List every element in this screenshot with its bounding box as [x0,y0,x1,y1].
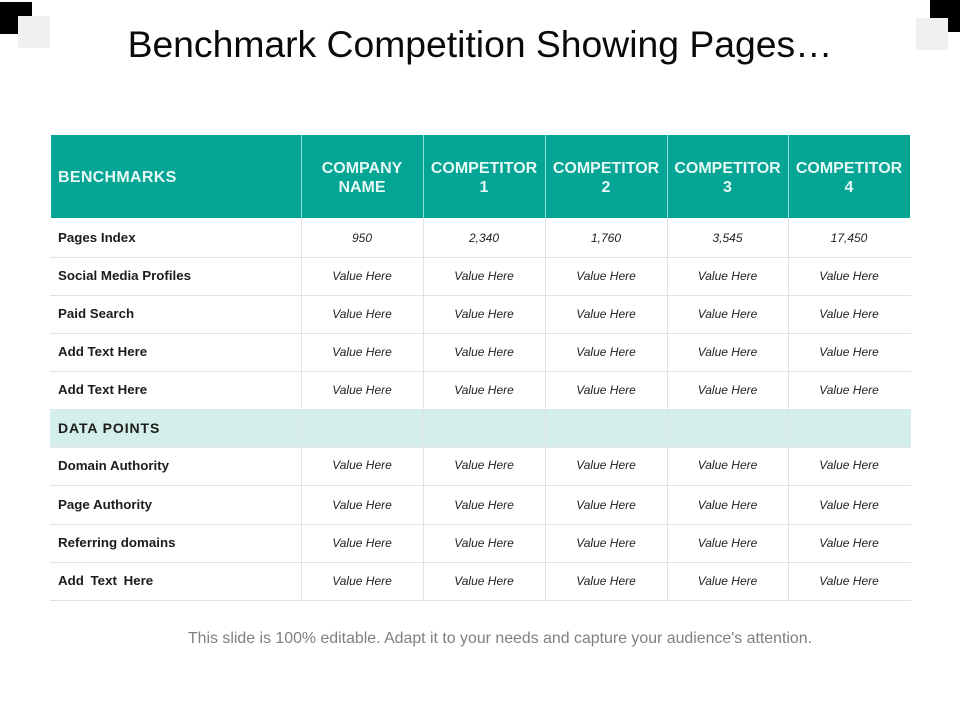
header: competitor 2 [545,135,667,218]
header: company name: COMPANY [322,160,402,177]
row: Social Media Profiles: Value Here [454,269,514,283]
row: Paid Search: Paid Search [58,306,134,321]
row: Add Text Here 2: Value Here [332,383,392,397]
row: Add Text Here: Value Here [454,345,514,359]
row: Pages Index: 17,450 [831,231,867,245]
header: competitor 2: COMPETITOR [553,160,659,177]
row: Social Media Profiles: Value Here [819,269,879,283]
row: Domain Authority: Value Here [576,458,636,472]
header: benchmarks [51,135,301,218]
row: Add Text Here 3: Value Here [819,574,879,588]
row: Social Media Profiles: Social Media Profiles [58,268,191,283]
row: Pages Index: 3,545 [712,231,743,245]
row: Paid Search: Value Here [576,307,636,321]
header: competitor 3: 3 [723,179,732,196]
header: competitor 1: 1 [480,179,488,196]
row: Add Text Here 3: Add Text Here [58,573,153,588]
row: Page Authority [50,486,911,525]
row: Add Text Here: Value Here [698,345,757,359]
icon: top-right corner squares [916,0,960,50]
header: competitor 4 [788,135,910,218]
row: Page Authority: Value Here [454,498,514,512]
row: Add Text Here 3 [50,562,911,601]
row: Social Media Profiles: Value Here [698,269,757,283]
row: Pages Index: Pages Index [58,230,136,245]
header: competitor 4: COMPETITOR [796,160,902,177]
row: Page Authority: Value Here [698,498,757,512]
row: Referring domains: Value Here [698,536,757,550]
row: Pages Index [50,219,911,258]
row: Social Media Profiles [50,257,911,296]
row: Domain Authority [50,447,911,486]
row: Add Text Here 2: Value Here [576,383,636,397]
row: Add Text Here 2: Value Here [454,383,514,397]
header: company name: NAME [338,179,386,196]
row: Paid Search: Value Here [332,307,392,321]
title: Benchmark Competition Showing Pages… [128,23,832,65]
row: Paid Search: Value Here [819,307,879,321]
row: Add Text Here [50,333,911,372]
row: Domain Authority: Value Here [819,458,879,472]
row: Paid Search: Value Here [454,307,514,321]
row: Pages Index: 1,760 [591,231,621,245]
row: Referring domains: Referring domains [58,535,175,550]
header: benchmarks: BENCHMARKS [58,169,177,186]
footer note: This slide is 100% editable. Adapt it to your needs and capture your audience's attention. [188,630,812,647]
row: Pages Index: 2,340 [469,231,499,245]
row: Add Text Here 3: Value Here [332,574,392,588]
header: company name [301,135,423,218]
row: Domain Authority: Domain Authority [58,458,169,473]
header: competitor 3: COMPETITOR [674,160,781,177]
row: Paid Search: Value Here [698,307,757,321]
row: Page Authority: Value Here [576,498,636,512]
row: Domain Authority: Value Here [454,458,514,472]
row: Add Text Here 2: Value Here [698,383,757,397]
row: Domain Authority: Value Here [332,458,392,472]
header: competitor 1 [423,135,545,218]
row: Referring domains: Value Here [454,536,514,550]
row: Referring domains [50,524,911,563]
row: Data Points section: DATA POINTS [58,420,160,436]
icon: top-left corner squares [0,2,50,48]
row: Add Text Here 2: Add Text Here [58,382,147,397]
row: Add Text Here 3: Value Here [576,574,636,588]
row: Add Text Here 3: Value Here [454,574,514,588]
row: Add Text Here: Value Here [332,345,392,359]
row: Referring domains: Value Here [576,536,636,550]
row: Add Text Here 2 [50,371,911,410]
header: competitor 1: COMPETITOR [431,160,537,177]
header: competitor 3 [667,135,788,218]
row: Add Text Here: Value Here [576,345,636,359]
row: Referring domains: Value Here [332,536,392,550]
row: Data Points section [50,409,911,448]
row: Domain Authority: Value Here [698,458,757,472]
row: Add Text Here 2: Value Here [819,383,879,397]
row: Page Authority: Value Here [332,498,392,512]
panel: benchmark table [50,135,911,601]
row: Add Text Here 3: Value Here [698,574,757,588]
header: competitor 4: 4 [845,179,853,196]
row: Page Authority: Value Here [819,498,879,512]
row: Social Media Profiles: Value Here [576,269,636,283]
row: Referring domains: Value Here [819,536,879,550]
row: Pages Index: 950 [352,231,372,245]
row: Add Text Here: Value Here [819,345,879,359]
header: competitor 2: 2 [602,179,610,196]
row: Add Text Here: Add Text Here [58,344,147,359]
row: Page Authority: Page Authority [58,497,152,512]
row: Social Media Profiles: Value Here [332,269,392,283]
row: Paid Search [50,295,911,334]
